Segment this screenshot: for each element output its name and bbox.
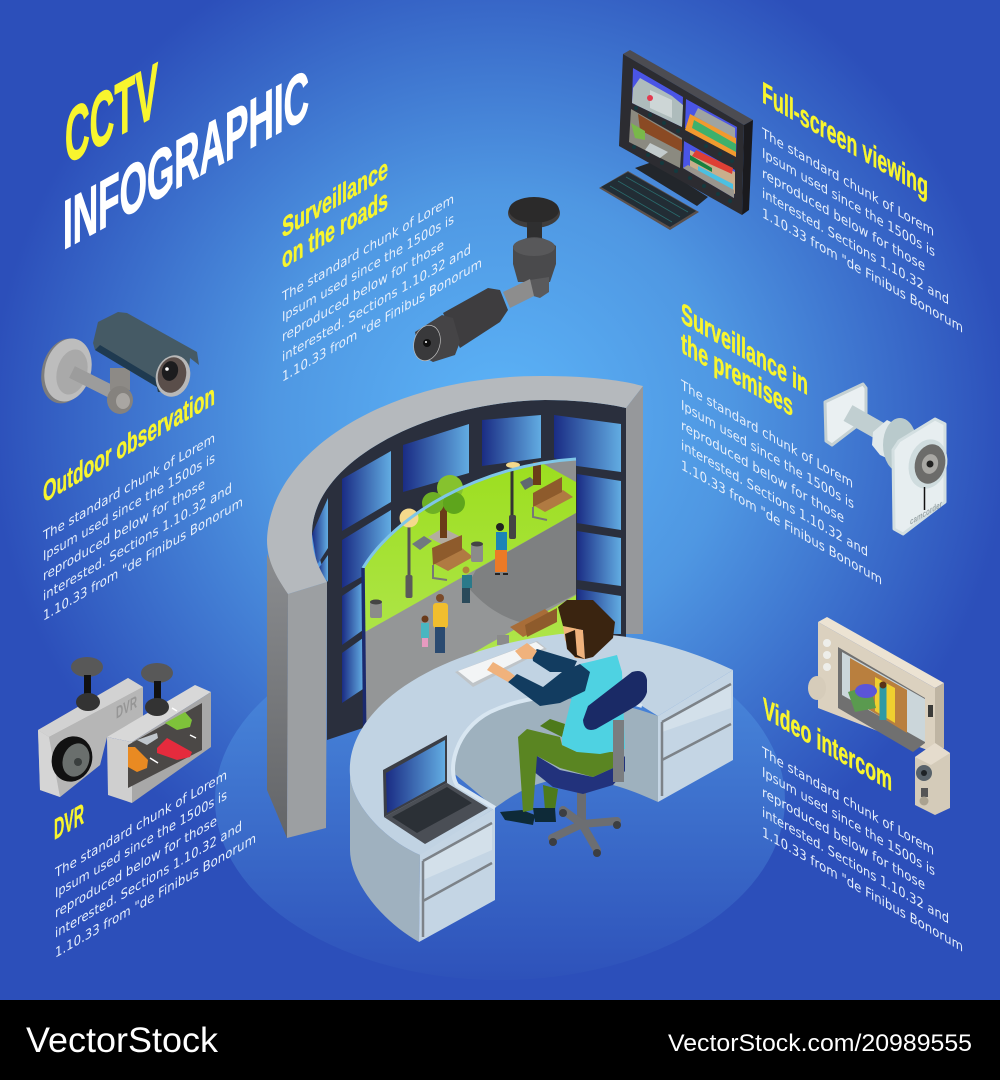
watermark: image reference: VectorStock.com/20989555 <box>668 1030 972 1057</box>
heading: surveillance on the roads: Surveillance <box>282 153 388 244</box>
heading: surveillance in the premises: Surveillance in <box>681 296 808 402</box>
body text: DVR: The standard chunk of Lorem <box>54 767 227 882</box>
body text: outdoor observation: 1.10.33 from "de Finibus Bonorum <box>43 493 243 625</box>
control dots <box>632 106 734 203</box>
far leg <box>543 785 558 810</box>
body text: intercom: The standard chunk of Lorem <box>761 744 934 859</box>
large curved park screen <box>363 459 576 756</box>
body text: full-screen: reproduced below for those <box>762 165 925 275</box>
panel: surveillance on the roads text <box>281 153 482 386</box>
heading: surveillance on the roads: on the roads <box>282 184 388 275</box>
panel: full-screen viewing text <box>761 75 963 337</box>
icon: DVR dashcam <box>38 657 211 803</box>
heading: surveillance on the roads <box>282 153 388 275</box>
body text: full-screen <box>761 125 963 337</box>
heading: surveillance in the premises: the premises <box>681 326 793 423</box>
body text: outdoor observation: Ipsum used since the 1500s is <box>43 450 215 565</box>
body text: roads: interested. Sections 1.10.32 and <box>282 241 471 366</box>
shoes <box>500 808 556 825</box>
body text: roads: 1.10.33 from "de Finibus Bonorum <box>282 254 482 386</box>
DVR camera unit: DVR <box>116 691 137 723</box>
body text: outdoor observation: The standard chunk of Lorem <box>42 430 215 545</box>
body text: full-screen: The standard chunk of Lorem <box>761 125 934 240</box>
body text: DVR: Ipsum used since the 1500s is <box>55 787 227 902</box>
footer watermark bar <box>0 1000 1000 1080</box>
far arm <box>515 643 577 672</box>
watermark: VectorStock logo: VectorStock <box>26 1021 219 1060</box>
body text: full-screen: interested. Sections 1.10.32 and <box>762 185 949 309</box>
body text: premises <box>680 377 882 589</box>
body text: DVR: 1.10.33 from "de Finibus Bonorum <box>55 830 256 962</box>
body text: DVR: interested. Sections 1.10.32 and <box>55 818 242 942</box>
torso <box>562 655 625 754</box>
DVR camera unit <box>38 678 143 797</box>
wall screens <box>312 415 621 703</box>
body text: outdoor observation <box>42 413 243 625</box>
panel: DVR text <box>54 750 256 962</box>
far thigh <box>540 719 565 737</box>
body text: intercom: interested. Sections 1.10.32 and <box>762 804 949 928</box>
body text: intercom <box>761 744 963 956</box>
floor ellipse <box>215 620 785 980</box>
screen: brick building <box>629 109 682 168</box>
body text: DVR: reproduced below for those <box>55 812 217 922</box>
heading: video intercom: Video intercom <box>763 691 892 798</box>
park road <box>365 459 576 722</box>
body text: premises: reproduced below for those <box>681 417 844 527</box>
park people <box>421 523 508 653</box>
body text: premises: Ipsum used since the 1500s is <box>681 397 854 513</box>
head <box>558 600 615 659</box>
laptop <box>383 735 488 844</box>
body text: intercom: Ipsum used since the 1500s is <box>762 764 935 880</box>
body text: roads <box>281 174 482 386</box>
screen: corner shop <box>683 141 735 198</box>
park trees <box>422 462 541 547</box>
office chair base <box>549 788 621 857</box>
chair post and back <box>583 671 647 782</box>
chair seat <box>530 754 625 794</box>
icon: monitor with four camera feeds <box>599 50 753 230</box>
central scene: control room <box>267 376 733 942</box>
DVR screen unit <box>107 685 211 803</box>
body text: premises: 1.10.33 from "de Finibus Bonorum <box>681 457 882 589</box>
icon: outdoor camera <box>34 312 199 414</box>
icon: video intercom <box>808 617 950 815</box>
body text: full-screen: 1.10.33 from "de Finibus Bonorum <box>762 205 963 337</box>
DVR suction mounts <box>71 657 173 716</box>
panel: DVR text: DVR <box>54 797 84 846</box>
park lamps <box>400 462 537 598</box>
keyboard <box>599 171 699 230</box>
body text: full-screen: Ipsum used since the 1500s is <box>762 145 935 261</box>
icon: camcorder premises camera: camcorder <box>910 499 942 528</box>
screen: hospital <box>632 68 683 127</box>
body text: roads: Ipsum used since the 1500s is <box>282 211 454 326</box>
operator <box>487 600 647 825</box>
body text: intercom: reproduced below for those <box>762 784 925 894</box>
body text: DVR <box>54 750 256 962</box>
curved video wall <box>267 376 643 838</box>
heading: surveillance in the premises <box>681 296 808 423</box>
body text: roads: reproduced below for those <box>282 236 444 346</box>
near leg <box>518 729 613 812</box>
desk <box>350 633 733 942</box>
panel: outdoor observation text <box>42 378 243 625</box>
icon: bullet road camera <box>410 197 560 364</box>
monitor stand <box>635 162 708 206</box>
panel: video intercom text <box>761 691 963 956</box>
panel: surveillance in the premises text <box>680 296 882 589</box>
park benches and bins <box>370 477 573 645</box>
icon: camcorder premises camera <box>825 384 953 534</box>
body text: premises: The standard chunk of Lorem <box>680 377 853 492</box>
desk keyboard <box>455 641 547 687</box>
body text: roads: The standard chunk of Lorem <box>281 191 454 306</box>
body text: intercom: 1.10.33 from "de Finibus Bonorum <box>762 824 963 956</box>
screen: shopping centre <box>685 99 737 157</box>
body text: premises: interested. Sections 1.10.32 and <box>681 437 868 561</box>
near arm <box>487 662 590 706</box>
title <box>63 46 309 265</box>
body text: outdoor observation: reproduced below for those <box>43 475 205 585</box>
body text: outdoor observation: interested. Sections 1.10.32 and <box>43 480 232 605</box>
heading: outdoor observation: Outdoor observation <box>43 378 215 509</box>
